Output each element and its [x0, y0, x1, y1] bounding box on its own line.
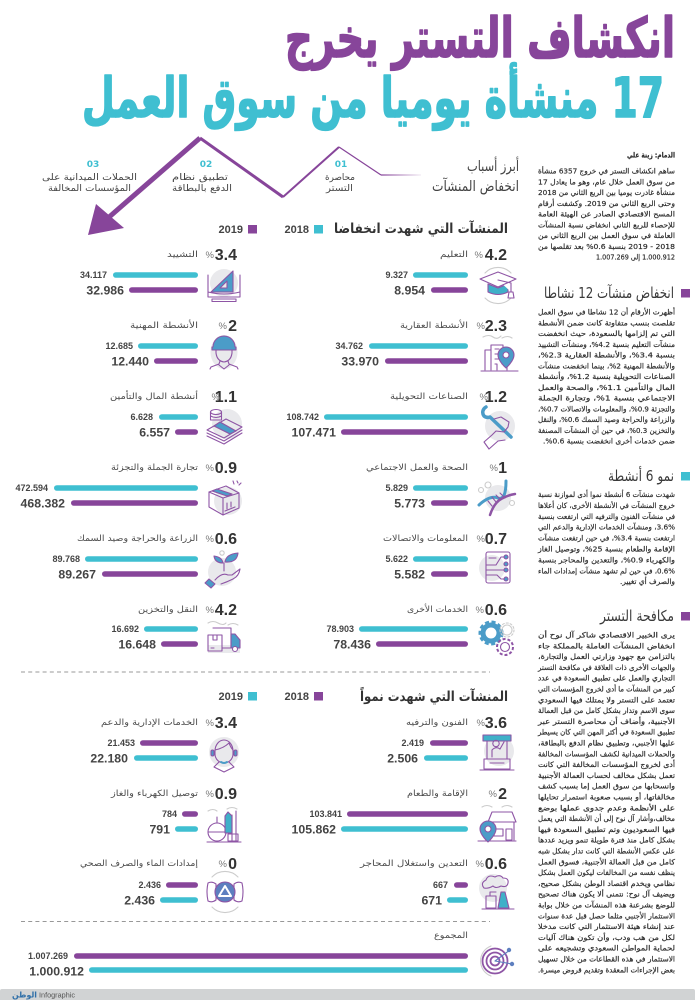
- text: 12 activities: منشآت التعليم بنسبة 4.2%، ومنشآت التشييد: [538, 339, 675, 349]
- icon: valve: [207, 871, 243, 913]
- icon: target: [481, 946, 514, 976]
- text: byline and intro: [538, 150, 675, 262]
- row: finance and insurance: 6.628: [130, 412, 153, 422]
- row: wholesale and retail: 472.594: [15, 483, 48, 493]
- text: 12 activities: ضمن خدمات أخرى انخفضت بنسبة 0.6%.: [543, 436, 675, 446]
- row: water and sewage: 2.436: [138, 880, 161, 890]
- row: information and communications: 5.622: [385, 554, 408, 564]
- footer logo: Infographic: [39, 992, 76, 1000]
- row: manufacturing: 1.2: [485, 389, 507, 406]
- row: water and sewage: [80, 856, 243, 913]
- text: fighting concealment: نظامي ويخدم اقتصاد الوطن بشكل صحيح،: [538, 879, 675, 888]
- text: fighting concealment: لحماية المواطن السعودي وتشجيعه على: [538, 944, 675, 953]
- row: information and communications: 5.582: [394, 568, 425, 582]
- row: real estate: 33.970: [341, 354, 379, 368]
- cause 02: الدفع بالبطاقة: [172, 184, 232, 194]
- row: accommodation and food: 103.841: [309, 809, 342, 819]
- row: real estate: [335, 318, 518, 371]
- row: agriculture: 89.267: [58, 568, 96, 582]
- causes heading: [432, 156, 519, 195]
- title: [82, 6, 675, 131]
- cause 01: التستر: [325, 184, 353, 194]
- row: construction: التشييد: [167, 250, 198, 260]
- divider: [21, 671, 490, 673]
- text: fighting concealment: [537, 630, 675, 974]
- text: fighting concealment: والحملات الميدانية لكشف المؤسسات المخالفة: [538, 749, 675, 758]
- text: 12 activities: [538, 306, 675, 446]
- row: health: 5.773: [394, 496, 425, 510]
- icon: parcel box: [209, 481, 242, 515]
- cause 02: تطبيق نظام: [172, 173, 229, 183]
- text: 12 activities: الصناعات التحويلية بنسبة 1.2%، وأنشطة: [538, 371, 675, 381]
- legend: growth: 2018: [285, 691, 309, 703]
- row: health: 1: [498, 460, 507, 477]
- row: manufacturing: 108.742: [286, 412, 319, 422]
- icon: headset agent: [209, 737, 239, 772]
- row: electricity and gas: [110, 786, 241, 842]
- icon: circuit board: [479, 552, 510, 583]
- row: transport and storage: %: [206, 605, 215, 616]
- row: administrative services: %: [206, 718, 215, 729]
- cause 01: [325, 160, 355, 194]
- text: 6 activities: شهدت منشآت 6 أنشطة نموا أدى لموازنة نسبة: [538, 489, 675, 499]
- footer logo: الوطن: [12, 990, 37, 1000]
- text: 12 activities: والتجزئة 0.9%، والمعلومات والاتصالات 0.7%،: [538, 404, 675, 413]
- row: wholesale and retail: %: [206, 463, 215, 474]
- text: byline and intro: الدمام: زينة علي: [627, 150, 675, 160]
- text: fighting concealment: سوى الاسم وتدار بشكل كامل من قبل العمالة: [538, 706, 675, 715]
- row: finance and insurance: 6.557: [139, 426, 170, 440]
- row: real estate: 34.762: [335, 341, 363, 351]
- row: professional activities: [105, 318, 238, 369]
- row: health: الصحة والعمل الاجتماعي: [366, 463, 468, 473]
- text: byline and intro: وحتى الربع الثاني من 2019. وكشفت أرقام: [538, 198, 675, 208]
- heading: 6 activities: نمو 6 أنشطة: [608, 466, 674, 485]
- row: mining and quarrying: 671: [421, 894, 442, 908]
- text: byline and intro: 1.000.912 إلى 1.007.269: [596, 252, 675, 262]
- cause 01: 01: [335, 160, 347, 170]
- row: administrative services: الخدمات الإدارية والدعم: [101, 718, 198, 728]
- row: electricity and gas: 784: [162, 809, 177, 819]
- text: fighting concealment: بعض الإجراءات المعقدة وتقديم قروض ميسرة.: [538, 965, 675, 974]
- cause 03: المؤسسات المخالفة: [48, 184, 131, 194]
- row: administrative services: [90, 715, 239, 772]
- heading: fighting concealment: مكافحة التستر: [599, 607, 674, 625]
- heading: 12 activities: انخفاض منشآت 12 نشاطا: [544, 284, 674, 302]
- row: other services: 78.903: [326, 624, 354, 634]
- row: construction: %: [206, 250, 215, 261]
- text: fighting concealment: وانسحابها من سوق العمل إما بسبب كشف: [538, 782, 675, 791]
- row: other services: [326, 602, 514, 655]
- row: transport and storage: 16.648: [118, 638, 156, 652]
- text: 12 activities: أظهرت الأرقام أن 12 نشاطا في سوق العمل: [538, 306, 675, 316]
- text: 12 activities: بنسبة 3.4%، والأنشطة العقارية 2.3%،: [538, 350, 675, 360]
- row: manufacturing: [286, 389, 515, 449]
- text: fighting concealment: مخالفاتها، أو بسبب صعوبة استمرار تحايلها: [538, 792, 675, 802]
- cause 02: [172, 160, 232, 194]
- zigzag arrow: [88, 138, 421, 235]
- row: education: التعليم: [440, 250, 468, 260]
- row: mining and quarrying: %: [476, 859, 485, 870]
- text: byline and intro: للإحصاء للربع الثاني انخفاض نسبة المنشآت: [538, 219, 675, 229]
- row: total: [28, 931, 514, 978]
- row: other services: الخدمات الأخرى: [407, 603, 468, 615]
- row: total: 1.007.269: [28, 951, 68, 961]
- row: construction: 32.986: [86, 284, 124, 298]
- row: other services: %: [476, 605, 485, 616]
- row: real estate: 2.3: [485, 318, 507, 335]
- cause 02: 02: [200, 160, 212, 170]
- row: construction: 34.117: [80, 270, 107, 280]
- text: 6 activities: 3.6%، ومنشآت الخدمات الإدارية والدعم التي: [538, 522, 675, 532]
- row: professional activities: %: [219, 321, 228, 332]
- text: fighting concealment: ينظف نفسه من المخالفات ليكون العمل بشكل: [538, 868, 675, 877]
- row: transport and storage: [111, 602, 240, 653]
- footer bar: [0, 989, 695, 1000]
- row: electricity and gas: 791: [149, 822, 170, 836]
- cause 03: [42, 160, 137, 194]
- row: administrative services: 22.180: [90, 752, 128, 766]
- row: agriculture: الزراعة والحراجة وصيد السمك: [77, 534, 198, 544]
- icon: factory smoke: [479, 874, 514, 909]
- row: finance and insurance: %: [212, 392, 221, 403]
- icon: worker helmet: [210, 335, 238, 369]
- text: fighting concealment: تطبيق السعودة في أكثر المهن التي كان يسيطر: [537, 727, 675, 737]
- text: fighting concealment: بالتزامن مع جهود وزارتي العمل والتجارة،: [538, 652, 675, 661]
- row: agriculture: 0.6: [215, 531, 237, 548]
- text: fighting concealment: التجاري والعمل على تطبيق السعودة في عدد: [538, 674, 675, 683]
- text: fighting concealment: للوضع بشرعنة هذه المنشآت من خلال بوابة: [538, 900, 675, 910]
- row: construction: 3.4: [215, 247, 237, 264]
- text: 6 activities: في منشآت الفنون والترفيه التي ارتفعت بنسبة: [538, 511, 675, 521]
- row: agriculture: 89.768: [52, 554, 80, 564]
- text: byline and intro: منشأة غادرت يوميا بين الربع الثاني من 2018: [538, 187, 675, 197]
- row: manufacturing: الصناعات التحويلية: [390, 392, 468, 402]
- icon: plant in hand: [205, 551, 240, 588]
- row: professional activities: 12.685: [105, 341, 133, 351]
- row: agriculture: %: [206, 534, 215, 545]
- icon: graduation cap: [480, 267, 516, 304]
- row: finance and insurance: أنشطة المال والتأمين: [110, 390, 198, 402]
- row: administrative services: 21.453: [107, 738, 135, 748]
- row: information and communications: %: [477, 534, 486, 545]
- icon: building and pin: [481, 336, 518, 371]
- text: 6 activities: الإقامة والطعام بنسبة 25%، وتوصيل الغاز: [537, 544, 675, 554]
- row: transport and storage: 4.2: [215, 602, 237, 619]
- text: 12 activities: الاجتماعي بنسبة 1%، وتجارة الجملة: [538, 394, 675, 402]
- legend: declines: 2018: [285, 224, 309, 236]
- text: fighting concealment: فيها السعوديون وتم تطبيق السعودة فيها: [538, 825, 675, 834]
- text: fighting concealment: مخالف،وأشار آل نوح إلى أن الأنشطة التي يعمل: [538, 813, 675, 823]
- text: fighting concealment: تعمل بشكل مخالف لحساب العمالة الأجنبية: [538, 771, 675, 780]
- row: mining and quarrying: التعدين واستغلال المحاجر: [359, 859, 468, 869]
- text: 12 activities: المال والتأمين 1.1%، والصحة والعمل: [538, 382, 675, 392]
- row: other services: 0.6: [485, 602, 507, 619]
- text: fighting concealment: على الأنظمة وعدم جدوى عملها بوضع: [538, 803, 675, 812]
- text: byline and intro: من سوق العمل خلال عام، وهو ما يعادل 17: [538, 177, 675, 186]
- row: accommodation and food: %: [489, 789, 498, 800]
- icon: DNA: [478, 481, 515, 515]
- row: arts and entertainment: 2.419: [401, 738, 424, 748]
- row: wholesale and retail: 468.382: [21, 496, 65, 510]
- text: fighting concealment: كامل من قبل العمالة الأجنبية، فسوق العمل: [538, 857, 675, 866]
- cause 01: محاصرة: [325, 173, 355, 183]
- text: byline and intro: ساهم انكشاف التستر في خروج 6357 منشأة: [538, 166, 675, 176]
- divider: [21, 920, 490, 922]
- row: wholesale and retail: تجارة الجملة والتجزئة: [111, 463, 199, 473]
- text: fighting concealment: بشكل كامل منذ فترة طويلة تنمو ويزيد عددها: [538, 836, 675, 845]
- row: water and sewage: %: [219, 859, 228, 870]
- row: manufacturing: 107.471: [292, 426, 336, 440]
- icon: money stack: [207, 409, 242, 444]
- row: health: [366, 460, 515, 515]
- text: 12 activities: تقلصت بنسب متفاوتة كانت ضمن الأنشطة: [538, 318, 675, 327]
- text: 6 activities: خروج المنشآت في الأنشطة الأخرى، كان أعلاها: [538, 500, 675, 510]
- text: fighting concealment: الأجنبية، وأضاف أن محاصرة التستر عبر: [537, 716, 675, 726]
- row: finance and insurance: [110, 389, 242, 444]
- row: accommodation and food: [292, 786, 516, 842]
- row: mining and quarrying: 667: [433, 880, 448, 890]
- row: construction: [80, 247, 240, 302]
- heading: declines: المنشآت التي شهدت انخفاضا: [334, 220, 508, 237]
- text: fighting concealment: عند إنشاء هيئة الاستثمار التي كانت مدخلا: [538, 922, 675, 931]
- text: fighting concealment: على عكس الأنشطة التي كانت تدار بشكل شبه: [538, 846, 675, 856]
- row: education: 9.327: [385, 270, 408, 280]
- row: accommodation and food: 105.862: [292, 822, 336, 836]
- legend: declines: 2019: [219, 224, 243, 236]
- row: electricity and gas: %: [206, 789, 215, 800]
- causes heading: انخفاض المنشآت: [432, 177, 519, 195]
- text: 12 activities: والتخزين 0.3%، في حين أن المنشآت المصنفة: [538, 425, 675, 435]
- icon: refinery: [207, 808, 241, 842]
- row: wholesale and retail: [15, 460, 242, 515]
- text: fighting concealment: لكل من هب ودب، وأن تكون هناك آليات: [538, 932, 675, 942]
- footer logo: [12, 990, 76, 1000]
- text: 6 activities: والكهرباء 0.9%، والتعدين والمحاجر بنسبة: [538, 555, 675, 564]
- row: transport and storage: 16.692: [111, 624, 139, 634]
- icon: set square and blueprint: [208, 269, 240, 302]
- row: arts and entertainment: %: [477, 718, 486, 729]
- row: real estate: %: [477, 321, 486, 332]
- text: 6 activities: 0.6%، في حين لم تشهد منشآت إمدادات الماء: [538, 565, 675, 575]
- row: accommodation and food: الإقامة والطعام: [407, 789, 468, 799]
- row: arts and entertainment: 2.506: [387, 752, 418, 766]
- row: education: 8.954: [394, 284, 425, 298]
- row: water and sewage: إمدادات الماء والصرف الصحي: [80, 859, 198, 869]
- text: fighting concealment: تعتمد على التستر ولا يمتلك فيها السعودي: [538, 695, 675, 704]
- row: total: المجموع: [434, 931, 468, 941]
- row: real estate: الأنشطة العقارية: [400, 319, 468, 331]
- cause 03: الحملات الميدانية على: [42, 173, 137, 183]
- text: byline and intro: 2018 - 2019 بنسبة 0.6% بعد تقلصها من: [538, 242, 675, 251]
- icon: hand with wrench: [483, 407, 515, 449]
- row: arts and entertainment: الفنون والترفيه: [406, 718, 468, 728]
- text: byline and intro: العاملة في سوق العمل بين الربع الثاني من: [538, 231, 675, 240]
- row: electricity and gas: توصيل الكهرباء والغاز: [110, 789, 199, 799]
- row: mining and quarrying: [359, 856, 514, 909]
- cause 03: 03: [87, 160, 99, 170]
- icon: market stall: [480, 735, 514, 770]
- text: fighting concealment: كبير من المنشآت ما أدى لخروج المؤسسات التي: [538, 684, 675, 694]
- row: wholesale and retail: 0.9: [215, 460, 237, 477]
- causes heading: أبرز أسباب: [467, 156, 519, 175]
- text: 6 activities: والصرف أي تغيير.: [620, 576, 675, 586]
- row: education: [385, 247, 516, 304]
- row: information and communications: 0.7: [485, 531, 507, 548]
- row: electricity and gas: 0.9: [215, 786, 237, 803]
- text: fighting concealment: عليها الأجنبي، وتطبيق نظام الدفع بالبطاقة،: [538, 738, 675, 748]
- row: professional activities: 2: [228, 318, 237, 335]
- row: information and communications: [383, 531, 510, 583]
- text: fighting concealment: يرى الخبير الاقتصادي شاكر آل نوح أن: [538, 630, 675, 640]
- row: mining and quarrying: 0.6: [485, 856, 507, 873]
- icon: delivery truck: [208, 622, 240, 653]
- row: arts and entertainment: 3.6: [485, 715, 507, 732]
- text: 6 activities: ارتفعت بنسبة 3.4%، في حين ارتفعت منشآت: [538, 533, 675, 543]
- row: water and sewage: 0: [228, 856, 237, 873]
- row: agriculture: [52, 531, 240, 588]
- legend: growth: 2019: [219, 691, 243, 703]
- text: fighting concealment: الاستثمار الأجنبي مثلما حصل قبل عدة سنوات: [538, 911, 675, 920]
- row: professional activities: الأنشطة المهنية: [130, 319, 198, 331]
- row: information and communications: المعلومات والاتصالات: [383, 534, 468, 544]
- row: education: %: [475, 250, 484, 261]
- text: 12 activities: والأنشطة المهنية 2%، بينما انخفضت منشآت: [538, 360, 675, 370]
- text: byline and intro: المسح الاقتصادي الصادر عن الهيئة العامة: [538, 210, 675, 218]
- row: finance and insurance: 1.1: [215, 389, 237, 406]
- row: administrative services: 3.4: [215, 715, 237, 732]
- row: water and sewage: 2.436: [124, 894, 155, 908]
- legend: growth: [219, 691, 323, 703]
- text: fighting concealment: والجهات الأخرى ذات العلاقة في مكافحة التستر: [537, 663, 675, 672]
- text: fighting concealment: الاستثمار في هذه القطاعات من خلال تسهيل: [538, 954, 675, 964]
- row: transport and storage: النقل والتخزين: [138, 605, 198, 615]
- text: 12 activities: التي تم إلزامها بالسعودة، حيث انخفضت: [538, 329, 675, 338]
- legend: declines: [219, 224, 323, 236]
- row: arts and entertainment: [387, 715, 514, 770]
- row: professional activities: 12.440: [111, 354, 149, 368]
- row: education: 4.2: [485, 247, 507, 264]
- row: total: 1.000.912: [29, 964, 84, 978]
- text: 12 activities: والزراعة والحراجة وصيد السمك 0.6%، والنقل: [538, 415, 675, 424]
- icon: gears: [480, 622, 514, 655]
- text: fighting concealment: انخفاض المنشآت العاملة بالمملكة جاء: [538, 640, 675, 650]
- row: accommodation and food: 2: [498, 786, 507, 803]
- icon: shop and pin: [478, 806, 516, 842]
- row: health: 5.829: [385, 483, 408, 493]
- row: health: %: [490, 463, 499, 474]
- text: 6 activities: [537, 489, 675, 586]
- heading: growth: المنشآت التي شهدت نمواً: [360, 686, 508, 705]
- row: other services: 78.436: [333, 638, 371, 652]
- text: fighting concealment: أدى لخروج المؤسسات المخالفة التي كانت: [538, 759, 675, 769]
- row: manufacturing: %: [480, 392, 489, 403]
- text: fighting concealment: ويضيف آل نوح: نتمنى ألا يكون هناك تصحيح: [538, 889, 675, 899]
